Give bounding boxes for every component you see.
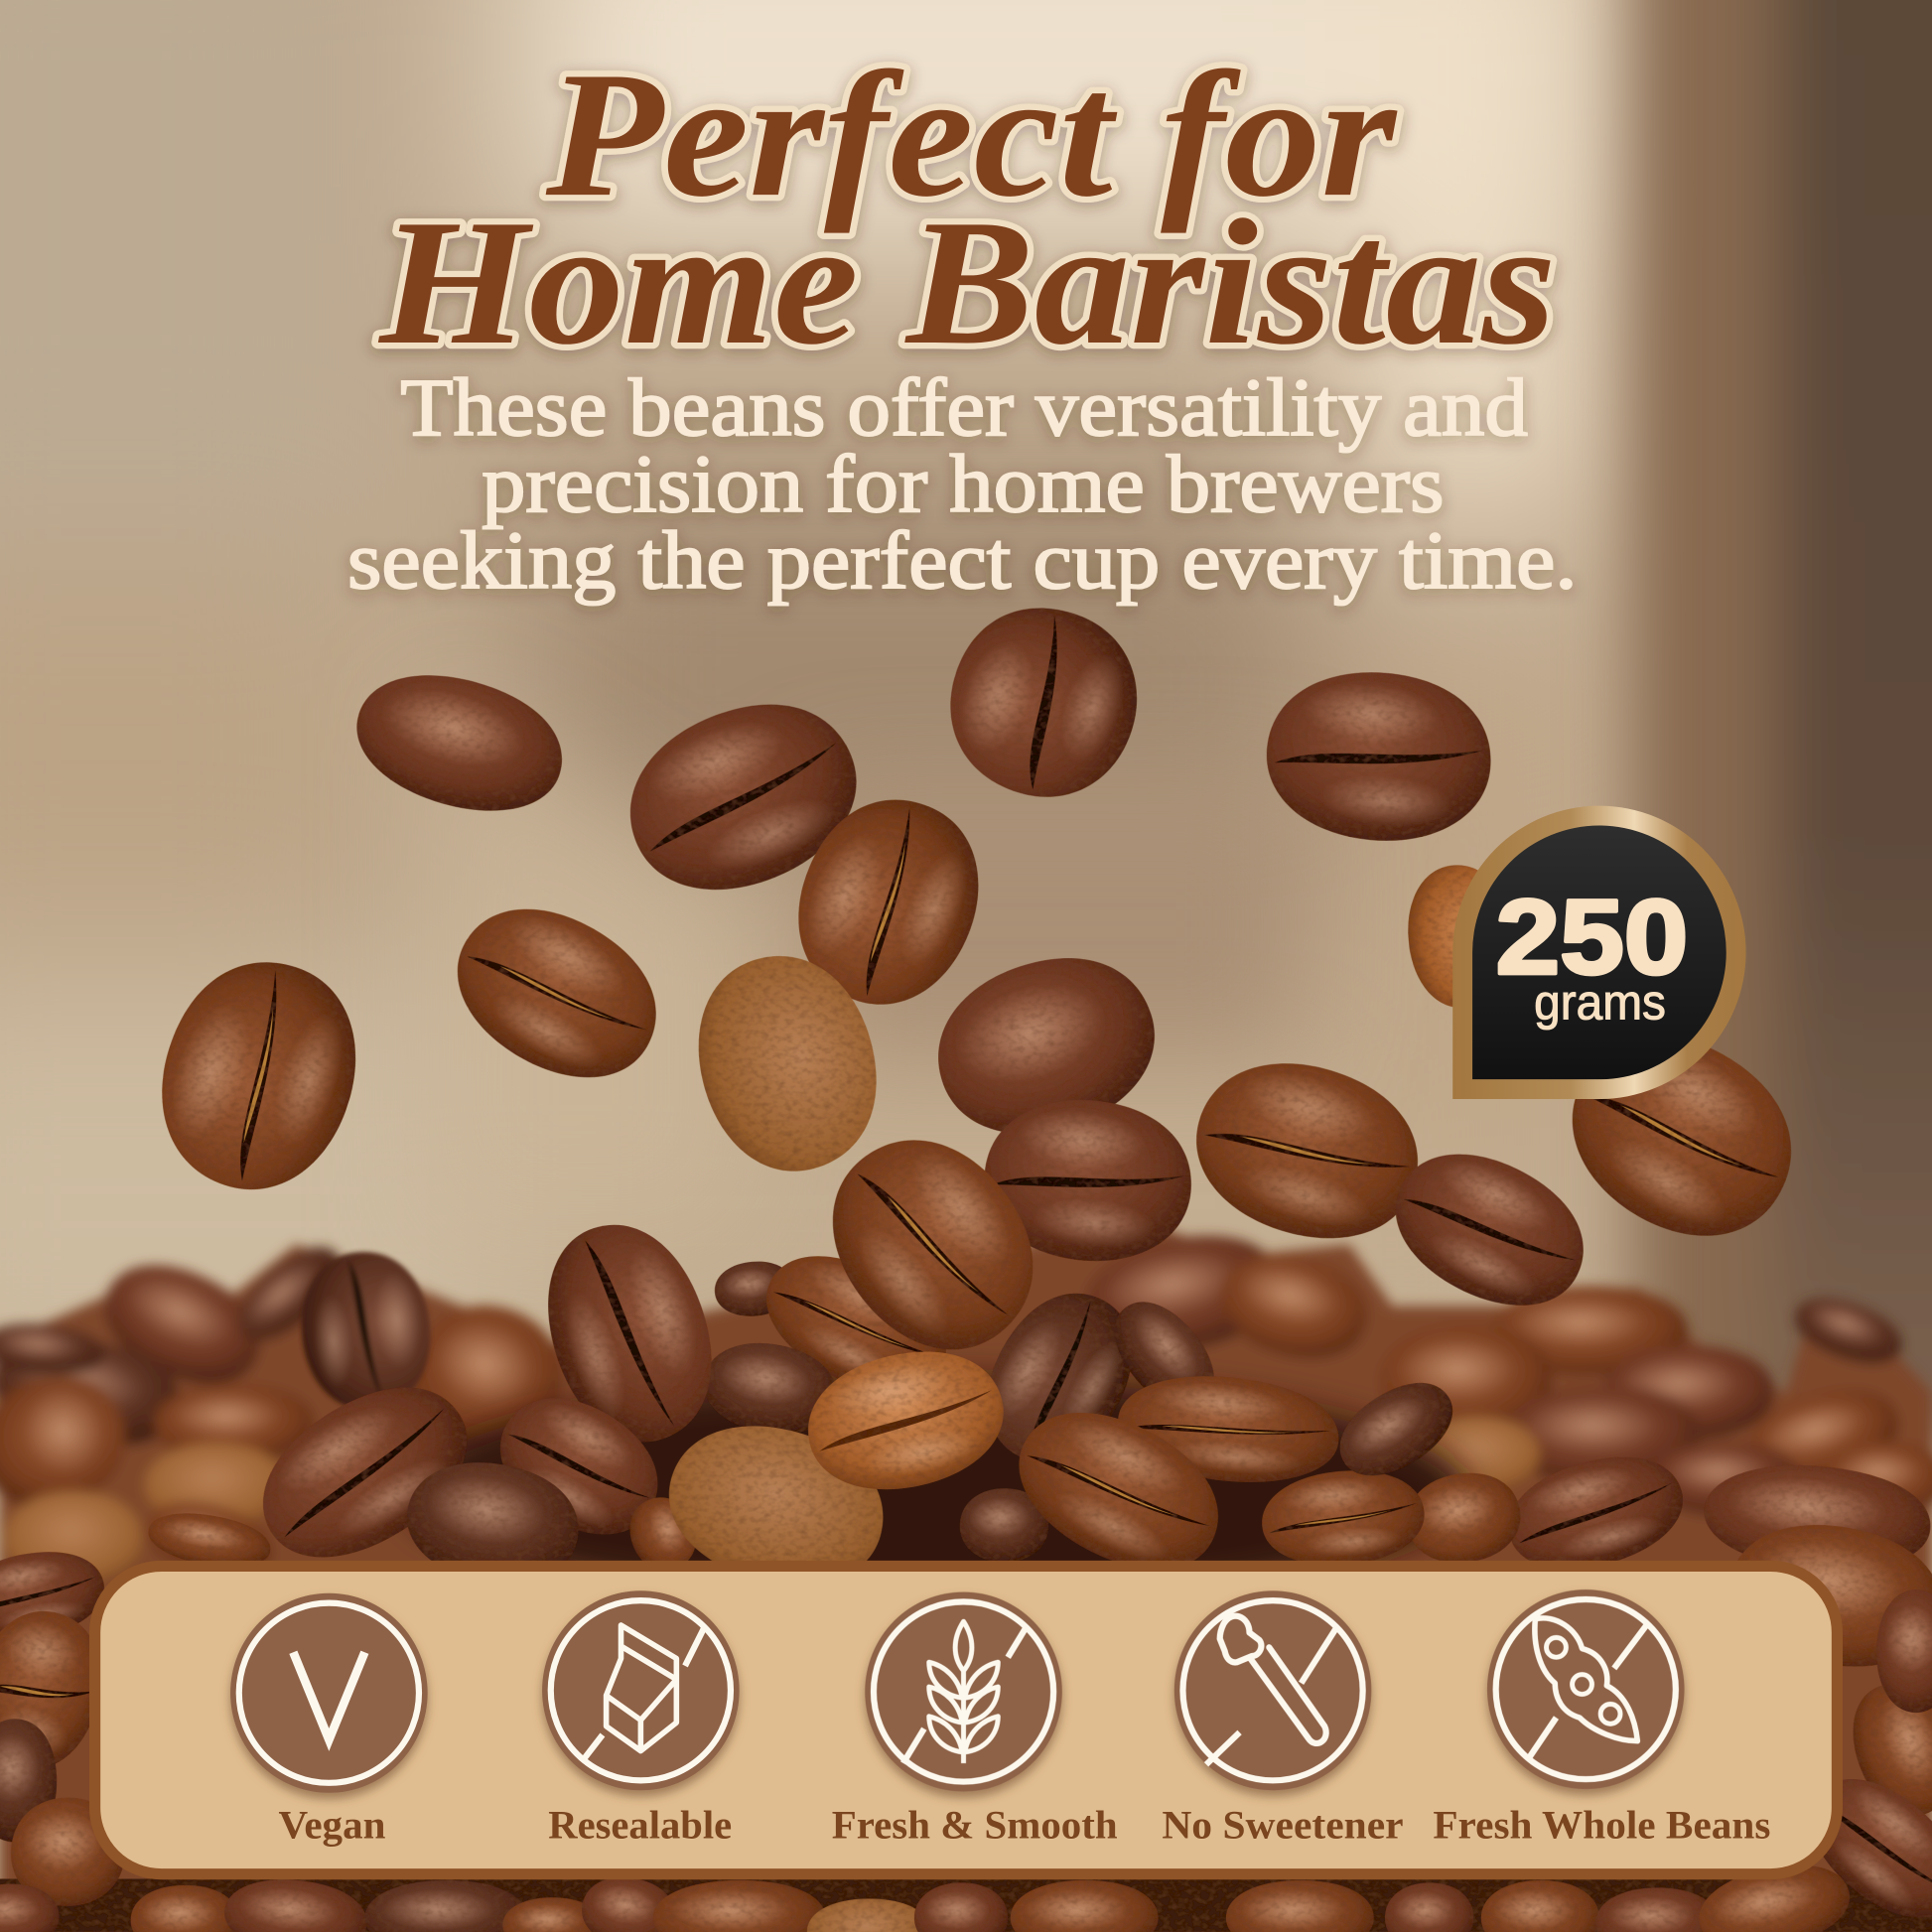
icon: resealable carton bbox=[542, 1590, 740, 1790]
label: vegan: Vegan bbox=[278, 1804, 385, 1848]
subtitle text block: seeking the perfect cup every time. bbox=[347, 514, 1578, 606]
flying bean: far right low bbox=[1372, 1126, 1607, 1333]
subtitle text block bbox=[347, 361, 1578, 606]
badge: 250 grams: 250 bbox=[1496, 877, 1688, 996]
flying bean: left middle bbox=[429, 877, 685, 1110]
icon: soybean pod bbox=[1487, 1589, 1685, 1789]
panel: product features bbox=[95, 1566, 1837, 1874]
icon: fresh and smooth wheat bbox=[865, 1591, 1062, 1792]
blurred tall bean at left of pile bbox=[295, 1247, 437, 1415]
flying bean: lower centre golden bbox=[794, 1102, 1071, 1387]
flying bean: top right bbox=[1260, 663, 1498, 850]
flying bean: smooth dark bbox=[916, 932, 1176, 1160]
flying bean: top centre blurred bbox=[927, 585, 1161, 820]
flying bean: right middle bbox=[1175, 1037, 1439, 1264]
title: Perfect for bbox=[545, 36, 1398, 234]
flying bean: centre with golden crease bbox=[769, 773, 1007, 1031]
subtitle text block: These beans offer versatility and bbox=[400, 361, 1528, 453]
title: Home Baristas bbox=[377, 184, 1556, 382]
foreground and flying coffee beans bbox=[0, 585, 1932, 1932]
icon: vegan bbox=[230, 1593, 428, 1793]
badge: 250 grams: grams bbox=[1534, 974, 1666, 1030]
flying bean: lower centre dark bbox=[977, 1090, 1199, 1271]
beans behind the panel edges and along the bottom bbox=[0, 1542, 1932, 1932]
badge: 250 grams bbox=[1452, 806, 1746, 1099]
label: fresh whole beans: Fresh Whole Beans bbox=[1433, 1804, 1770, 1848]
flying bean: right of badge bbox=[1538, 999, 1827, 1274]
label: resealable: Resealable bbox=[548, 1804, 732, 1848]
background blurred coffee bean pile bbox=[0, 1220, 1932, 1932]
flying bean: far left bbox=[134, 938, 383, 1213]
label: fresh and smooth: Fresh & Smooth bbox=[832, 1804, 1118, 1848]
flying bean: hidden behind badge bbox=[1402, 861, 1518, 1012]
icon: no sweetener dropper bbox=[1174, 1590, 1371, 1790]
bean pile foreground bbox=[145, 1204, 1932, 1682]
title bbox=[377, 36, 1556, 382]
dark shadow between foreground beans bbox=[407, 1380, 1466, 1601]
subtitle text block: precision for home brewers bbox=[482, 438, 1445, 529]
flying bean: top left bbox=[342, 653, 578, 832]
flying bean: upper centre bbox=[604, 674, 883, 920]
flying bean: smooth light bbox=[676, 936, 898, 1190]
label: no sweetener: No Sweetener bbox=[1162, 1804, 1404, 1848]
